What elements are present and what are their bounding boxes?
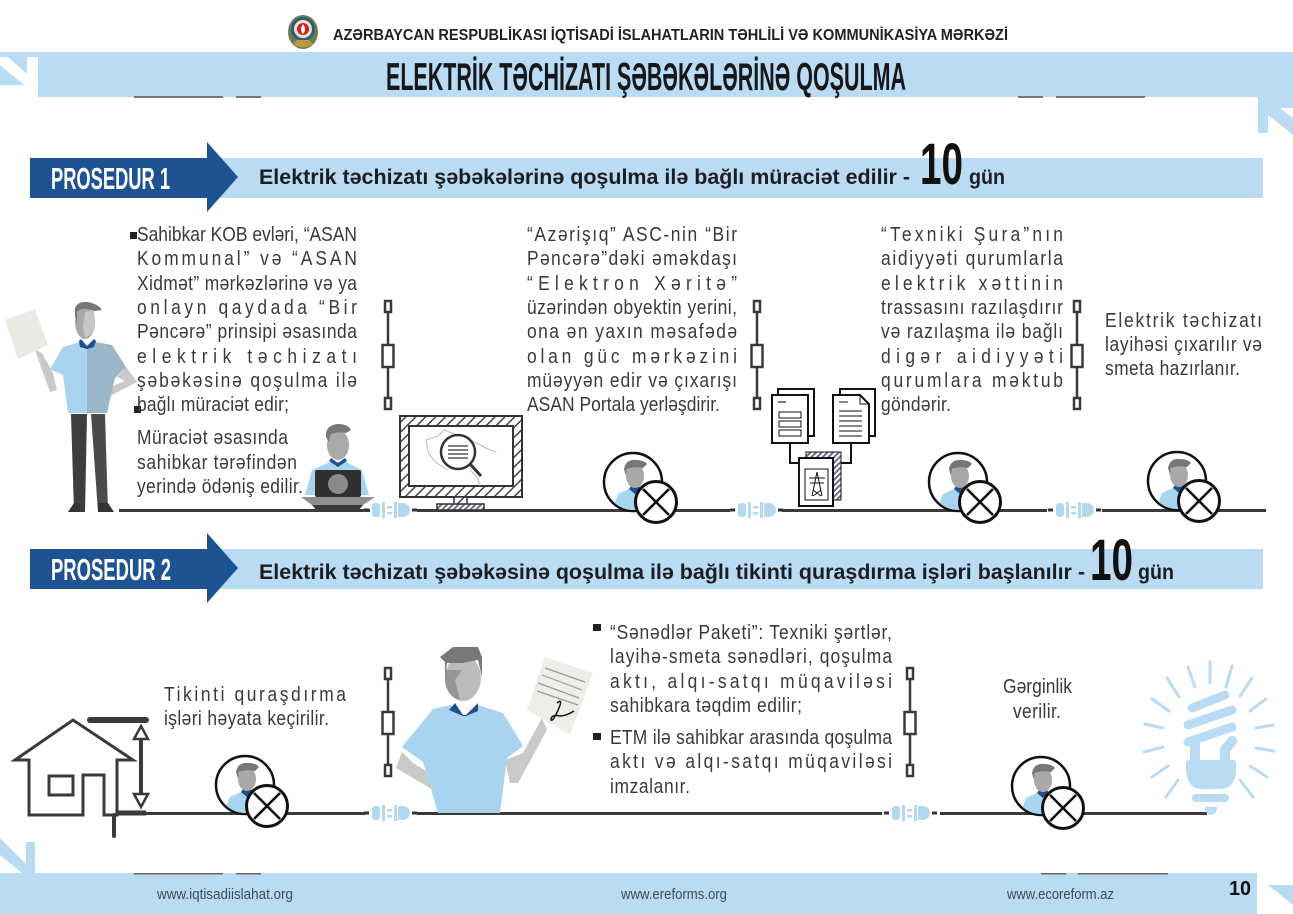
procedure 1 step 1 text: Müraciət əsasında: [137, 427, 288, 449]
procedure 2 header: Elektrik təchizatı şəbəkəsinə qoşulma ilə bağlı tikinti quraşdırma işləri başlanılır -: [259, 561, 1085, 584]
separators row 1: [382, 301, 1082, 409]
badge: approval person 1: [604, 453, 676, 522]
badge: approval person 3: [1148, 452, 1220, 522]
icon: man with signed paper: [396, 647, 593, 813]
gerginlik text: verilir.: [1013, 701, 1061, 723]
procedure 1 step 3 text: və razılaşma ilə bağlı: [881, 321, 1063, 343]
procedure 1 step 1 text: onlayn qaydada “Bir: [137, 297, 358, 319]
documents package text: aktı, alqı-satqı müqaviləsi: [610, 671, 892, 693]
icon: monitor with map: [400, 416, 522, 510]
procedure 2 header: 10: [1090, 528, 1133, 593]
procedure 1 step 3 text: göndərir.: [881, 394, 951, 416]
procedure 1 step 2 text: ona ən yaxın məsafədə: [527, 321, 737, 343]
procedure 1 step 1 text: bağlı müraciət edir;: [137, 394, 289, 416]
documents package text: imzalanır.: [610, 776, 690, 798]
procedure 1 step 1 text: Xidmət” mərkəzlərinə və ya: [137, 273, 357, 295]
footer link 2: www.ereforms.org: [620, 886, 727, 903]
procedure 1 step 4 text: smeta hazırlanır.: [1105, 358, 1240, 380]
icon: documents: [772, 389, 875, 506]
procedure 1 step 3 text: [881, 224, 1064, 416]
documents package text: sahibkara təqdim edilir;: [610, 695, 802, 717]
procedure 1 step 2 text: üzərindən obyektin yerini,: [527, 297, 737, 319]
footer link 3: www.ecoreform.az: [1006, 886, 1114, 903]
footer link 1: www.iqtisadiislahat.org: [156, 886, 293, 903]
procedure 1 header: 10: [920, 132, 963, 197]
procedure 1 step 4 text: [1105, 310, 1262, 380]
procedure 1 header: Elektrik təchizatı şəbəkələrinə qoşulma ilə bağlı müraciət edilir -: [259, 166, 910, 189]
procedure 1 step 1 text: Pəncərə” prinsipi əsasında: [137, 321, 357, 343]
procedure 1 step 1 text: Sahibkar KOB evləri, “ASAN: [137, 224, 357, 246]
icon: light bulb: [1144, 662, 1274, 815]
badge: approval person 2: [929, 453, 1000, 522]
tikinti text: işləri həyata keçirilir.: [164, 708, 329, 730]
procedure 1 step 1 text: sahibkar tərəfindən: [137, 452, 297, 474]
page number: 10: [1229, 878, 1251, 900]
procedure 1 step 2 text: “Azərişıq” ASC-nin “Bir: [527, 224, 738, 246]
timeline row 1: [119, 502, 1266, 518]
procedure 1 header: gün: [969, 166, 1005, 189]
documents package text: aktı və alqı-satqı müqaviləsi: [610, 751, 892, 773]
timeline row 2: [146, 805, 1207, 821]
top header band: [0, 52, 1293, 135]
procedure 1 step 2 text: ASAN Portala yerləşdirir.: [527, 394, 720, 416]
documents package text: ETM ilə sahibkar arasında qoşulma: [610, 727, 892, 749]
tikinti text: Tikinti quraşdırma: [164, 684, 346, 706]
procedure 1 step 1 text: elektrik təchizatı: [137, 346, 357, 368]
procedure 1 step 3 text: digər aidiyyəti: [881, 346, 1063, 368]
badge: approval person 5: [1012, 757, 1084, 828]
procedure 1 step 1 text: [130, 224, 358, 498]
footer band: [0, 838, 1293, 914]
procedure 1 step 3 text: qurumlara məktub: [881, 370, 1063, 392]
procedure 1 step 1 text: Kommunal” və “ASAN: [137, 248, 357, 270]
separators row 2: [382, 668, 916, 776]
procedure 1 step 1 text: yerində ödəniş edilir.: [137, 476, 303, 498]
procedure 2 header: PROSEDUR 2: [51, 552, 171, 587]
procedure 1 step 2 text: “Elektron Xəritə”: [527, 273, 737, 295]
procedure 1 step 4 text: Elektrik təchizatı: [1105, 310, 1262, 332]
procedure 1 step 3 text: aidiyyəti qurumlarla: [881, 248, 1063, 270]
icon: house with connection: [15, 720, 148, 836]
documents package text: layihə-smeta sənədləri, qoşulma: [610, 646, 892, 668]
gerginlik text: Gərginlik: [1003, 676, 1072, 698]
procedure 1 step 2 text: müəyyən edir və çıxarışı: [527, 370, 737, 392]
icon: person at laptop: [301, 424, 375, 511]
procedure 1 step 3 text: trassasını razılaşdırır: [881, 297, 1064, 319]
procedure 1 step 4 text: layihəsi çıxarılır və: [1105, 334, 1262, 356]
procedure 1 step 2 text: Pəncərə”dəki əməkdaşı: [527, 248, 737, 270]
procedure 1 step 3 text: elektrik xəttinin: [881, 273, 1063, 295]
badge: approval person 4: [216, 756, 288, 826]
organisation name: AZƏRBAYCAN RESPUBLİKASI İQTİSADİ İSLAHATLARIN TƏHLİLİ VƏ KOMMUNİKASİYA MƏRKƏZİ: [333, 27, 1008, 44]
procedure 1 step 2 text: olan güc mərkəzini: [527, 346, 737, 368]
procedure 1 step 3 text: “Texniki Şura”nın: [881, 224, 1063, 246]
icon: state emblem: [288, 15, 318, 49]
procedure 1 header: PROSEDUR 1: [51, 161, 170, 196]
procedure 1 step 1 text: şəbəkəsinə qoşulma ilə: [137, 370, 357, 392]
procedure 2 header: gün: [1138, 561, 1174, 584]
documents package text: [593, 622, 892, 798]
procedure 1 step 2 text: [527, 224, 738, 416]
procedure 2 header: [30, 528, 1263, 603]
documents package text: “Sənədlər Paketi”: Texniki şərtlər,: [610, 622, 892, 644]
icon: man holding paper: [5, 302, 137, 512]
tikinti text: [164, 684, 346, 730]
gerginlik text: [1003, 676, 1072, 723]
procedure 1 header: [30, 132, 1263, 212]
